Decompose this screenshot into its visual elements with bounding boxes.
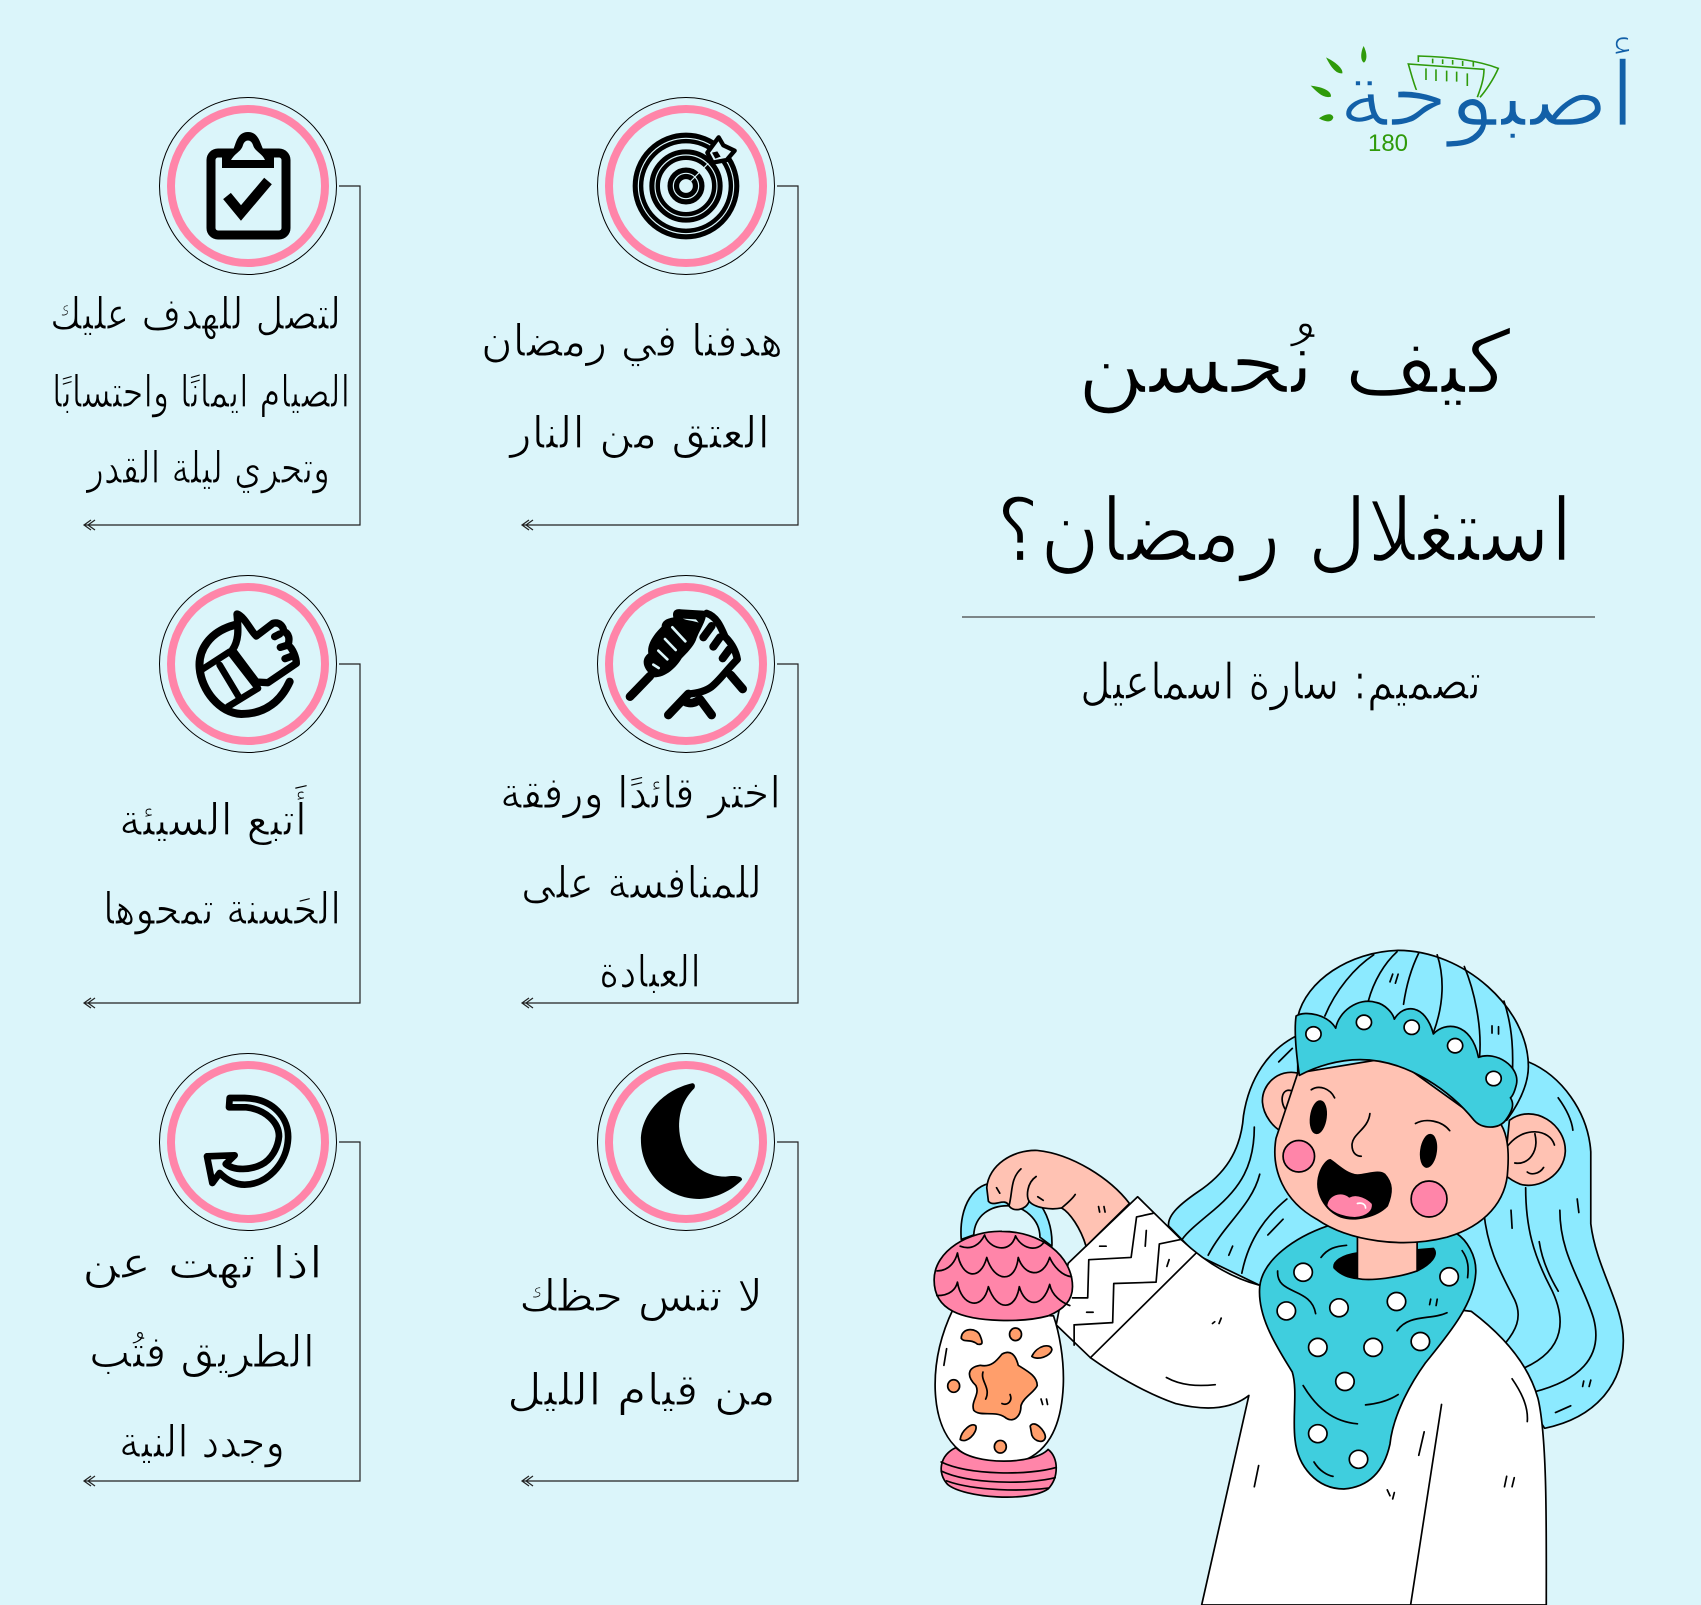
torso: [1056, 1197, 1546, 1605]
illustration: girl with lantern: [934, 950, 1623, 1605]
logo number: 180: [1368, 130, 1408, 157]
panel: good deeds: [84, 576, 360, 1008]
lantern star and spots: [948, 1328, 1052, 1453]
hair strands: [1182, 1048, 1596, 1413]
cheeks: [1283, 1141, 1447, 1217]
icon: clipboard: [160, 98, 336, 274]
connector: [84, 664, 360, 1008]
face: [1275, 1057, 1508, 1243]
logo wordmark: أصبوحة: [1338, 36, 1636, 148]
icon: clasped hands: [598, 576, 774, 752]
text: night prayer: لا تنس حظك: [519, 1271, 763, 1322]
lantern base: [941, 1448, 1056, 1497]
text: good deeds: الحَسنة تمحوها: [103, 884, 341, 935]
text: goal: هدفنا في رمضان: [481, 316, 783, 367]
panel: companions: [500, 576, 798, 1008]
connector: [84, 1142, 360, 1486]
text: companions: [500, 768, 781, 998]
neck: [1334, 1235, 1435, 1279]
lantern: [934, 1183, 1086, 1497]
connector: [522, 664, 798, 1008]
text: goal: العتق من النار: [508, 408, 770, 459]
connector: [84, 186, 360, 530]
text: repentance: [82, 1238, 323, 1468]
connector: [522, 1142, 798, 1486]
robe details: [1073, 1213, 1527, 1605]
icon: crescent moon: [598, 1054, 774, 1230]
lantern glass: [935, 1309, 1063, 1465]
ears: [1262, 1072, 1565, 1185]
title line 2: استغلال رمضان؟: [996, 479, 1573, 582]
logo book: [1408, 56, 1498, 97]
eyes and brows: [1309, 1087, 1450, 1168]
title: [996, 311, 1573, 582]
text: companions: العبادة: [599, 947, 701, 998]
text: good deeds: [103, 784, 341, 935]
text: companions: للمنافسة على: [521, 858, 762, 909]
text: repentance: اذا تهت عن: [82, 1238, 323, 1289]
mouth: [1318, 1160, 1391, 1219]
panel: night prayer: [507, 1054, 798, 1486]
lantern handle: [961, 1183, 1052, 1246]
hand: [987, 1150, 1129, 1246]
logo sun leaves: [1311, 46, 1366, 121]
hair cap: [1298, 950, 1528, 1120]
text: fasting: الصيام ايمانًا واحتسابًا: [52, 367, 350, 418]
panel: fasting checklist: [50, 98, 360, 530]
title line 1: كيف نُحسن: [1077, 311, 1511, 414]
icon: thumb up: [160, 576, 336, 752]
text: fasting: وتحري ليلة القدر: [85, 443, 330, 494]
back hair: [1169, 1034, 1623, 1428]
text: fasting: لتصل للهدف عليك: [50, 289, 341, 340]
text: fasting: [50, 289, 350, 494]
panel: repentance: [82, 1054, 360, 1486]
logo: [1311, 36, 1636, 157]
connector: [522, 186, 798, 530]
headband: [1295, 1001, 1517, 1127]
icon: return arrow: [160, 1054, 336, 1230]
text: repentance: الطريق فتُب: [89, 1327, 315, 1378]
scarf: [1260, 1226, 1476, 1489]
text: good deeds: أَتبع السيئة: [119, 784, 308, 846]
lantern dome: [934, 1231, 1073, 1320]
text: night prayer: من قيام الليل: [507, 1365, 776, 1416]
panel: goal: [481, 98, 798, 530]
text: night prayer: [507, 1271, 776, 1416]
text: companions: اختر قائدًا ورفقة: [500, 768, 781, 819]
text: goal: [481, 316, 783, 459]
icon: target: [598, 98, 774, 274]
designer credit: تصميم: سارة اسماعيل: [1080, 653, 1481, 711]
text: repentance: وجدد النية: [119, 1417, 285, 1468]
